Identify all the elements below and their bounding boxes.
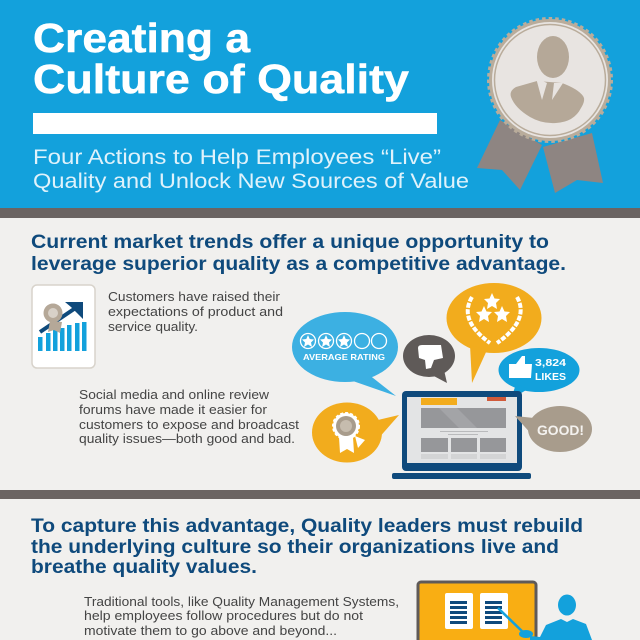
section heading: market trends xyxy=(31,231,566,275)
bubble: award ribbon xyxy=(312,402,399,462)
bubble: laurel stars xyxy=(446,283,542,383)
text: customer expectations: expectations of product and xyxy=(108,305,283,319)
section heading: market trends: Current market trends offer a unique opportunity to xyxy=(31,231,549,253)
title: Creating a xyxy=(33,15,251,61)
text: traditional tools: motivate them to go above and beyond... xyxy=(84,624,337,638)
bubble: good xyxy=(515,406,592,452)
bubble: 3,824 likes: 3,824 xyxy=(535,357,566,369)
subtitle: Four Actions to Help Employees “Live” xyxy=(33,146,441,169)
bubble: average rating xyxy=(292,312,398,396)
bubble: 3,824 likes: LIKES xyxy=(535,371,566,383)
title: Culture of Quality xyxy=(33,56,409,102)
text: social media: quality issues—both good and bad. xyxy=(79,432,295,446)
section heading: capture advantage: the underlying culture so their organizations live and xyxy=(31,536,559,558)
text: traditional tools: Traditional tools, like Quality Management Systems, xyxy=(84,595,399,609)
laptop xyxy=(392,391,531,479)
text: social media xyxy=(79,388,300,446)
text: customer expectations: service quality. xyxy=(108,320,198,334)
icon: presenter at board xyxy=(418,582,592,640)
section heading: market trends: leverage superior quality as a competitive advantage. xyxy=(31,253,566,275)
title xyxy=(33,15,409,102)
section heading: capture advantage: breathe quality values. xyxy=(31,556,257,578)
title underline bar xyxy=(33,113,437,134)
text: traditional tools: help employees follow procedures but do not xyxy=(84,609,364,623)
bubble: average rating: AVERAGE RATING xyxy=(303,352,385,362)
bubble: 3,824 likes xyxy=(498,348,580,399)
text: customer expectations: Customers have raised their xyxy=(108,290,280,304)
text: customer expectations xyxy=(108,290,283,334)
subtitle xyxy=(33,146,469,193)
header panel xyxy=(0,0,640,208)
text: social media: forums have made it easier for xyxy=(79,403,267,417)
subtitle: Quality and Unlock New Sources of Value xyxy=(33,170,469,193)
text: social media: customers to expose and broadcast xyxy=(79,418,300,432)
bubble: thumbs down xyxy=(403,335,455,383)
bubble: good: GOOD! xyxy=(537,423,584,438)
section heading: capture advantage: To capture this advantage, Quality leaders must rebuild xyxy=(31,515,583,537)
icon: growth chart card xyxy=(32,285,95,368)
icon: ribbon badge with person xyxy=(477,19,611,193)
text: social media: Social media and online review xyxy=(79,388,270,402)
section divider xyxy=(0,208,640,218)
section divider xyxy=(0,490,640,499)
section heading: capture advantage xyxy=(31,515,583,578)
text: traditional tools xyxy=(84,595,399,638)
